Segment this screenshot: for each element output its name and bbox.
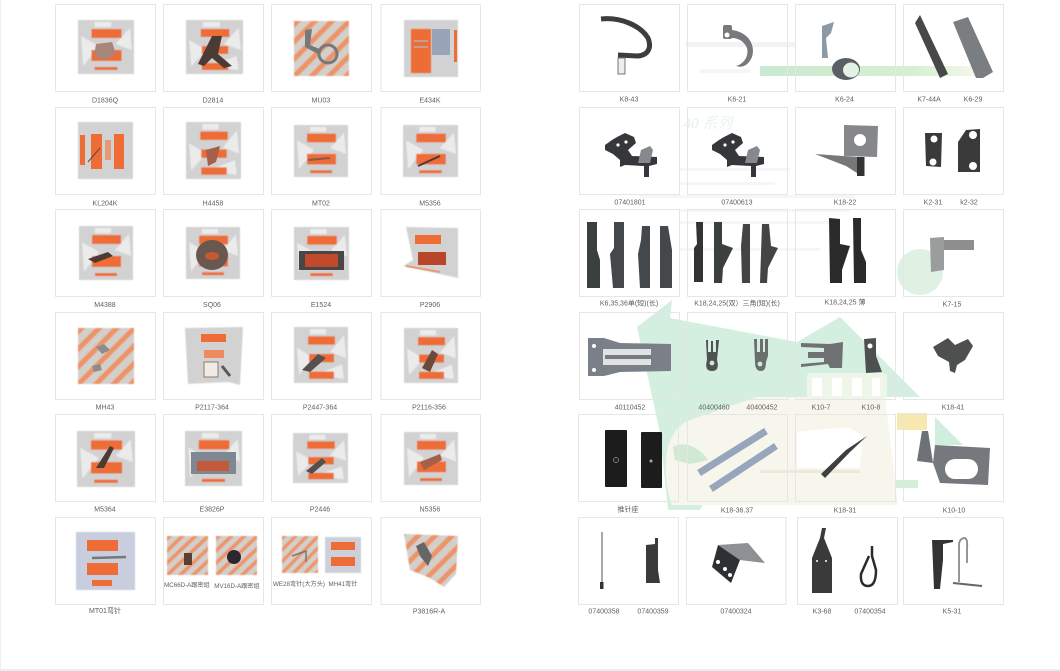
card: SQ06 [164, 210, 264, 309]
background watermark: sewing machine [637, 42, 975, 510]
background watermark: sewing machine: 40 系列 [684, 115, 735, 132]
card: MT02 [272, 108, 372, 208]
card: D1836Q [56, 4, 156, 104]
card: SQ06: SQ06 [203, 302, 221, 309]
card: K6-21 [688, 4, 788, 104]
card: K10-10: K10-10 [943, 508, 965, 514]
card: WE28 and MH41 [272, 518, 372, 604]
card: MC66D-A and MV16D-A [164, 518, 264, 604]
card: K18-22: K18-22 [834, 200, 856, 206]
card: KL204K: KL204K [93, 200, 118, 208]
card: K18-36.37: K18-36.37 [721, 508, 753, 514]
card: K18,24,25 thin: K18,24,25 薄 [825, 298, 865, 306]
card: N5356: N5356 [420, 506, 440, 514]
card: 07400324 [686, 518, 786, 616]
card: K7-15 [904, 210, 1004, 308]
card: 40110452 [580, 312, 680, 412]
card: P2117-364 [164, 312, 264, 412]
card: E434K [381, 4, 480, 104]
card: E3826P: E3826P [200, 506, 225, 514]
card: K18-31: K18-31 [834, 508, 856, 514]
card: K10-7 and K10-8: K10-7 [812, 404, 830, 412]
card: K5-31 [904, 518, 1004, 616]
card: K7-44A and K6-29: K7-44A [917, 96, 941, 104]
card: K18-22 [796, 108, 896, 206]
card: 07400358 and 07400359 [578, 518, 678, 616]
card: MU03 [272, 4, 372, 104]
card: 07400358 and 07400359: 07400358 [588, 608, 620, 616]
card: K10-7 and K10-8: K10-8 [862, 404, 880, 412]
card: P2447-364 [272, 312, 372, 412]
card: 07400324: 07400324 [720, 608, 752, 616]
card: MT01 [56, 518, 156, 615]
card: K8-43: K8-43 [620, 96, 638, 104]
card: MC66D-A and MV16D-A: MC66D-A跟密组 [164, 581, 210, 589]
card: 40400460 and 40400452: 40400460 [698, 404, 730, 412]
card: M5364 [56, 414, 156, 514]
card: K6-24 [796, 4, 896, 104]
card: K3-68 and 07400354: 07400354 [854, 608, 886, 616]
card: E434K: E434K [419, 98, 441, 104]
card: M5356: M5356 [419, 200, 441, 208]
card: M4388: M4388 [94, 302, 116, 309]
card: P2906: P2906 [420, 302, 440, 309]
card: M5356 [381, 108, 480, 208]
card: P2116-356: P2116-356 [412, 404, 446, 412]
card: K18-41 [904, 312, 1004, 412]
card: K18,24,25 thin [796, 210, 896, 306]
card: P2906 [381, 210, 480, 309]
card: push needle seat [578, 414, 678, 514]
card: D2814 [164, 4, 264, 104]
card: P2446 [272, 414, 372, 514]
card: K10-7 and K10-8 [796, 312, 896, 412]
card: K7-15: K7-15 [943, 302, 961, 308]
card: KL204K [56, 108, 156, 208]
card: K8-43 [580, 4, 680, 104]
card: P3816R-A [381, 518, 480, 616]
card: K18-36.37 [688, 414, 788, 514]
card: H4458 [164, 108, 264, 208]
card: MT01: MT01弯针 [89, 606, 121, 615]
card: K18,24,25 triple [688, 210, 788, 308]
card: K6-21: K6-21 [728, 96, 746, 104]
left panel: bagged parts [56, 4, 480, 616]
card: K3-68 and 07400354 [798, 518, 898, 616]
right panel: metal parts [578, 4, 1004, 616]
card: M5364: M5364 [94, 506, 116, 514]
card: MU03: MU03 [312, 98, 330, 104]
card: K5-31: K5-31 [943, 608, 961, 616]
card: P2446: P2446 [310, 506, 330, 514]
card: 07401801 [580, 108, 680, 206]
card: 40400460 and 40400452: 40400452 [746, 404, 778, 412]
card: MH43: MH43 [96, 404, 114, 412]
card: MH43 [56, 312, 156, 412]
card: WE28 and MH41: WE28弯针(大方头) [273, 580, 325, 588]
card: P2447-364: P2447-364 [303, 404, 337, 412]
card: 07400613 [688, 108, 788, 206]
card: K6,35,36 [580, 210, 680, 308]
card: 40110452: 40110452 [615, 404, 645, 412]
card: K2-31 and k2-32 [904, 108, 1004, 206]
card: P2117-364: P2117-364 [195, 404, 229, 412]
card: K7-44A and K6-29: K6-29 [964, 96, 982, 104]
card: 07400358 and 07400359: 07400359 [637, 608, 669, 616]
card: K6-24: K6-24 [835, 96, 854, 104]
card: K18-31 [796, 414, 896, 514]
card: E1524: E1524 [311, 302, 331, 309]
card: N5356 [381, 414, 480, 514]
card: MC66D-A and MV16D-A: MV16D-A跟密组 [214, 582, 260, 590]
card: P3816R-A: P3816R-A [413, 608, 445, 616]
card: K6,35,36: K6,35,36单(短)(长) [600, 298, 658, 308]
card: K2-31 and k2-32: K2-31 [924, 200, 942, 206]
card: push needle seat: 推针座 [618, 504, 638, 514]
card: D2814: D2814 [203, 98, 223, 104]
card: M4388 [56, 210, 156, 309]
card: WE28 and MH41: MH41弯针 [329, 580, 357, 588]
card: MT02: MT02 [312, 200, 330, 208]
card: 40400460 and 40400452 [688, 312, 788, 412]
card: P2116-356 [381, 312, 480, 412]
card: K2-31 and k2-32: k2-32 [960, 200, 978, 206]
card: E3826P [164, 414, 264, 514]
card: E1524 [272, 210, 372, 309]
card: K3-68 and 07400354: K3-68 [813, 608, 831, 616]
card: K18-41: K18-41 [942, 404, 964, 412]
card: K7-44A and K6-29 [904, 4, 1004, 104]
card: K10-10 [904, 414, 1004, 514]
card: K18,24,25 triple: K18,24,25(双）三角(短)(长) [694, 298, 780, 308]
card: 07400613: 07400613 [721, 200, 753, 206]
card: 07401801: 07401801 [614, 200, 646, 206]
card: D1836Q: D1836Q [92, 98, 119, 104]
card: H4458: H4458 [203, 200, 223, 208]
